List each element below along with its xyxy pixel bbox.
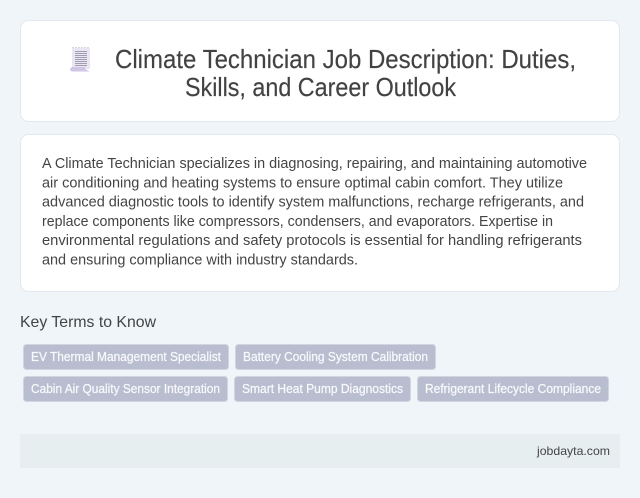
icon: document scroll bbox=[70, 48, 90, 72]
description text bbox=[42, 156, 587, 268]
footer text: jobdayta.com bbox=[536, 444, 610, 458]
panel: description card bbox=[20, 134, 620, 292]
title: Skills, and Career Outlook bbox=[185, 74, 456, 102]
chip: Cabin Air Quality Sensor Integration bbox=[24, 376, 228, 402]
footer bar bbox=[20, 434, 620, 468]
title bbox=[115, 46, 576, 102]
description text: and ensuring compliance with industry standards. bbox=[42, 252, 358, 268]
description text: advanced diagnostic tools to identify system malfunctions, recharge refrigerants, and bbox=[42, 195, 584, 211]
chip: Refrigerant Lifecycle Compliance bbox=[418, 376, 608, 402]
description text: air conditioning and heating systems to ensure optimal cabin comfort. They utilize bbox=[42, 175, 563, 191]
chip: Battery Cooling System Calibration bbox=[236, 344, 436, 370]
chip: EV Thermal Management Specialist: EV Thermal Management Specialist bbox=[31, 350, 222, 364]
chip: Battery Cooling System Calibration: Battery Cooling System Calibration bbox=[243, 350, 428, 364]
description text: environmental regulations and safety protocols is essential for handling refrigerants bbox=[42, 233, 582, 249]
chip: Smart Heat Pump Diagnostics bbox=[234, 376, 410, 402]
description text: A Climate Technician specializes in diagnosing, repairing, and maintaining automotive bbox=[42, 156, 587, 172]
title: Climate Technician Job Description: Duties, bbox=[115, 46, 576, 74]
chip: Smart Heat Pump Diagnostics: Smart Heat Pump Diagnostics bbox=[242, 382, 403, 396]
description text: replace components like compressors, condensers, and evaporators. Expertise in bbox=[42, 214, 553, 230]
heading: key terms: Key Terms to Know bbox=[20, 314, 156, 331]
chip: Cabin Air Quality Sensor Integration: Cabin Air Quality Sensor Integration bbox=[31, 382, 220, 396]
chip: EV Thermal Management Specialist bbox=[24, 344, 228, 370]
chip group: key terms bbox=[24, 344, 608, 402]
chip: Refrigerant Lifecycle Compliance: Refrigerant Lifecycle Compliance bbox=[425, 382, 601, 396]
panel: title card bbox=[20, 20, 620, 122]
